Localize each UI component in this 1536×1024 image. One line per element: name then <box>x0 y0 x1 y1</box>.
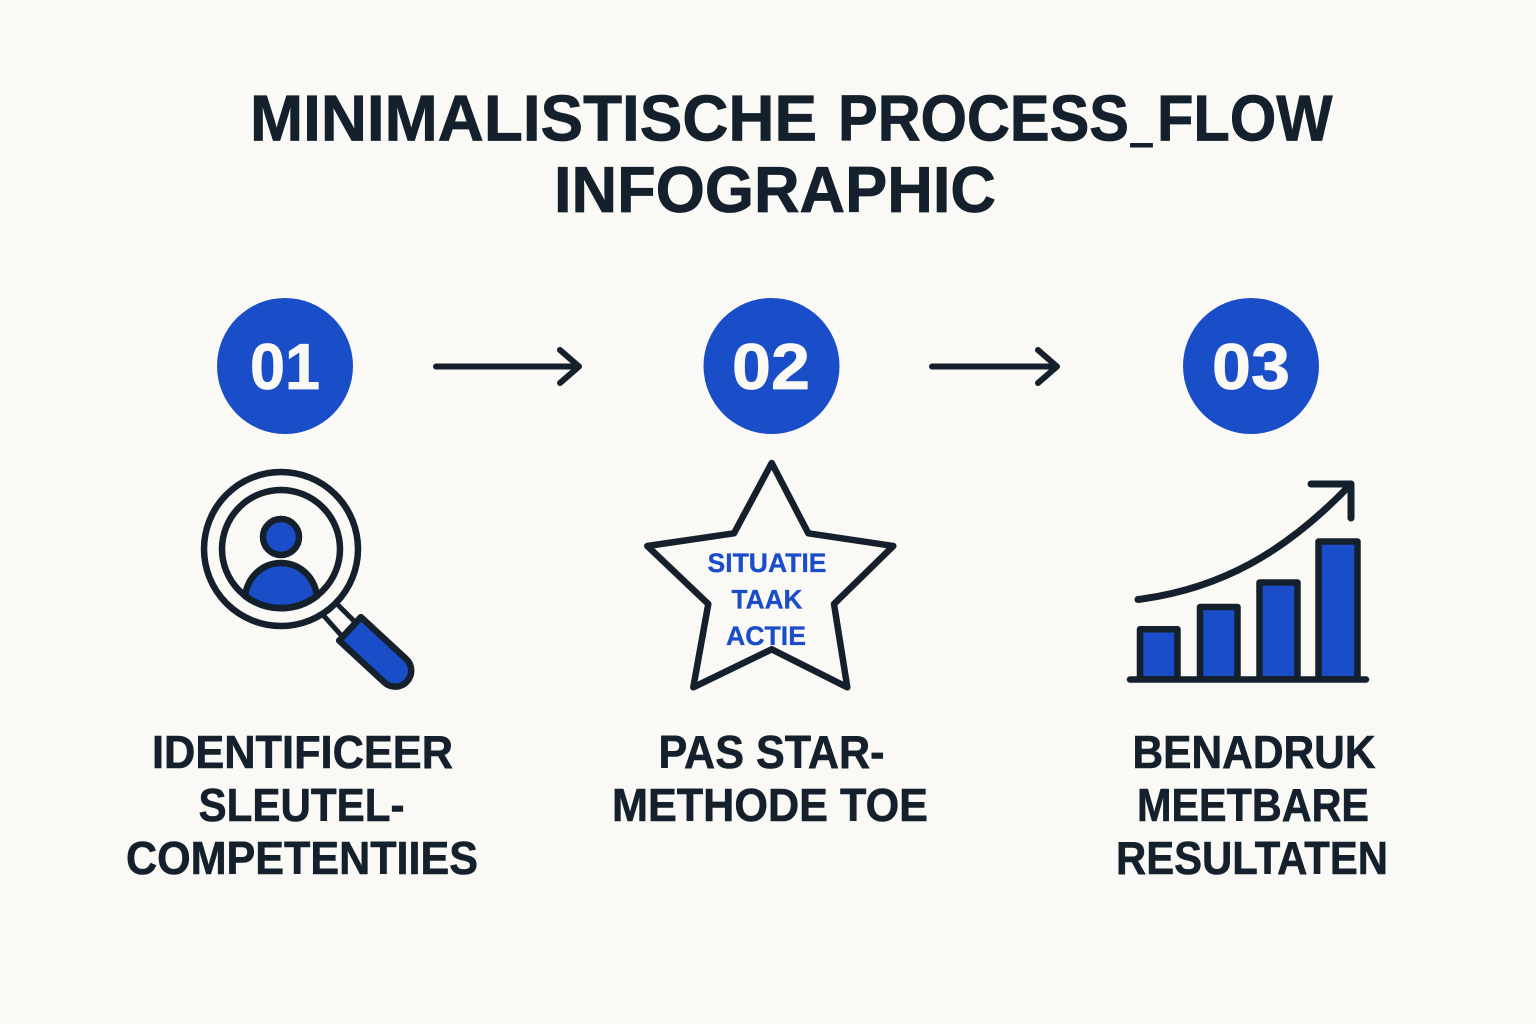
title: _ <box>1130 80 1152 152</box>
icon: star with STAR labels: TAAK <box>732 584 803 614</box>
step 1 label: IDENTIFICEER <box>152 726 453 778</box>
title: FLOW <box>1157 82 1333 154</box>
step 1 badge: 01 <box>250 330 320 403</box>
step 1 label <box>126 726 478 884</box>
icon: star with STAR labels: ACTIE <box>726 621 806 651</box>
title: MINIMALISTISCHE <box>250 82 817 154</box>
step 3 badge <box>1183 298 1319 434</box>
step 3 label: BENADRUK <box>1132 726 1376 778</box>
step 3 label: MEETBARE <box>1137 779 1369 831</box>
step 1 label: COMPETENTIIES <box>126 832 478 884</box>
step 3 badge: 03 <box>1212 330 1290 403</box>
title: PROCESS <box>838 82 1129 154</box>
step 1 label: SLEUTEL- <box>198 779 404 831</box>
icon: rising bar chart with arrow <box>1130 484 1366 680</box>
step 1 badge <box>217 298 353 434</box>
step 3 label <box>1116 726 1388 884</box>
icon: magnifying glass with person <box>204 472 418 693</box>
title <box>250 80 1333 226</box>
arrow 1 to 2 <box>436 350 579 383</box>
icon: star with STAR labels: SITUATIE <box>708 548 826 578</box>
step 2 label <box>612 726 928 831</box>
icon: star with STAR labels <box>647 463 893 687</box>
arrow 2 to 3 <box>932 350 1057 383</box>
step 2 label: PAS STAR- <box>658 726 884 778</box>
step 2 badge <box>704 298 840 434</box>
title: INFOGRAPHIC <box>554 153 996 226</box>
step 2 badge: 02 <box>732 330 810 403</box>
step 2 label: METHODE TOE <box>612 779 928 831</box>
step 3 label: RESULTATEN <box>1116 832 1388 884</box>
